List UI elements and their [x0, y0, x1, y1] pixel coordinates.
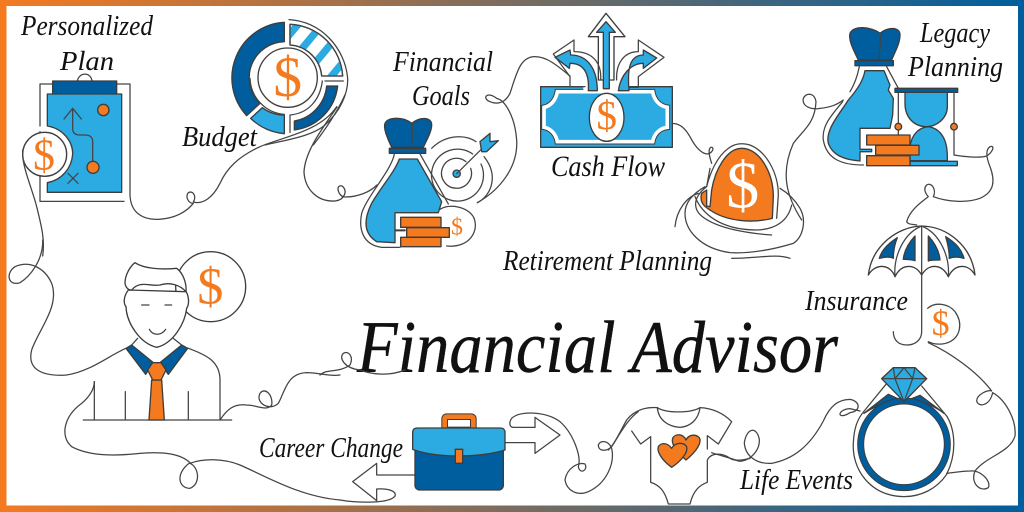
bag body	[366, 159, 442, 243]
ring band fill	[861, 401, 947, 488]
connector to umbrella	[907, 146, 993, 225]
panel: budget donut chart	[232, 14, 353, 145]
title: Financial Advisor	[356, 307, 839, 389]
connector to cash flow	[477, 57, 570, 203]
connector to man	[23, 150, 43, 256]
knot crease	[879, 35, 881, 60]
ring shoulders	[864, 394, 944, 413]
gem	[882, 368, 927, 402]
small coin outline	[928, 304, 960, 344]
heading: budget: Budget	[182, 121, 258, 153]
clasp	[455, 449, 463, 463]
canopy panels	[879, 236, 964, 261]
segment stripes	[290, 24, 343, 76]
dollar sign: $	[33, 130, 55, 179]
case flap	[413, 428, 505, 456]
connector nest to bag	[786, 94, 843, 220]
money bubble	[176, 252, 246, 322]
panel: legacy planning bag and hourglass	[786, 28, 993, 225]
panel: advisor figure	[9, 240, 340, 500]
panel: cash flow bill and arrows	[541, 13, 672, 147]
target rings	[431, 137, 492, 203]
centre circle	[258, 48, 317, 107]
heading: planning: Planning	[907, 51, 1003, 83]
clipboard clip ring	[77, 74, 92, 82]
panel: career change briefcase	[320, 352, 638, 502]
bag knot	[385, 118, 432, 147]
segment dark	[232, 22, 284, 116]
left arrow	[340, 463, 415, 502]
heading: plan: Plan	[59, 46, 114, 76]
hourglass bottom bowl	[910, 127, 947, 161]
target arrow fletching	[480, 133, 498, 152]
panel: retirement nest egg	[672, 123, 803, 258]
heading: career change: Career Change	[259, 432, 403, 464]
plan dots	[87, 104, 109, 173]
bag band	[855, 61, 893, 66]
clipboard outline	[40, 84, 337, 219]
handle fill	[445, 417, 473, 430]
segment dark small	[294, 86, 338, 130]
face details	[132, 305, 182, 345]
heading: goals: Goals	[412, 80, 470, 112]
dollar sign: $	[726, 149, 759, 222]
hair	[125, 263, 186, 292]
dollar sign: $	[197, 258, 223, 316]
title connector	[320, 352, 405, 375]
heading: cash flow: Cash Flow	[551, 150, 665, 183]
dollar sign: $	[596, 92, 617, 138]
dollar coin	[23, 132, 67, 176]
head	[124, 290, 189, 347]
panel: life events ring	[712, 343, 1015, 497]
gem facets	[882, 368, 927, 402]
panel: insurance umbrella	[868, 226, 975, 345]
plan route arrow	[64, 108, 93, 183]
dollar sign: $	[451, 214, 463, 240]
centre arrow	[588, 13, 625, 80]
clipboard sheet	[47, 94, 122, 192]
canopy ribs	[895, 226, 949, 277]
connector from clipboard	[9, 240, 126, 375]
ring band	[861, 401, 947, 488]
bag outline	[361, 154, 448, 247]
ring outer outline	[853, 384, 954, 497]
hourglass pendulum dots	[895, 123, 957, 130]
connector from bag to onesie	[510, 412, 638, 493]
bag knot	[850, 28, 900, 60]
heading: retirement planning: Retirement Planning	[502, 245, 712, 277]
case body	[415, 445, 503, 490]
clipboard header	[53, 81, 117, 96]
collar	[126, 345, 188, 374]
dollar sign: $	[932, 303, 950, 343]
outer swirl line	[265, 20, 348, 145]
right arrow	[617, 40, 664, 91]
connector life events	[712, 399, 860, 463]
connector to title	[220, 373, 340, 420]
bag body	[828, 71, 893, 161]
hourglass top bar	[895, 88, 958, 92]
connector: budget to goals	[304, 107, 377, 201]
small coin	[440, 206, 475, 246]
body lines	[83, 348, 232, 420]
centre arrow fill	[597, 22, 615, 89]
umbrella handle	[893, 275, 922, 345]
target bullseye	[453, 170, 460, 177]
segment light	[251, 108, 284, 134]
heading: personalized plan: Personalized	[20, 10, 153, 42]
panel: personalized plan clipboard	[23, 74, 337, 256]
knot crease	[412, 123, 413, 147]
bag outline	[823, 67, 898, 165]
heading: life events: Life Events	[739, 464, 853, 496]
arrow base gap	[583, 83, 620, 92]
left arrow	[553, 40, 601, 91]
target arrow shaft	[457, 147, 483, 174]
panel: onesie with hearts	[608, 408, 750, 504]
nest strands	[685, 187, 803, 258]
hourglass top bowl	[905, 92, 947, 127]
oval with dollar	[589, 93, 624, 141]
connector from cash flow	[672, 123, 713, 163]
coin stack	[867, 135, 919, 166]
inner ring	[250, 78, 284, 114]
back heart	[672, 435, 700, 460]
tie knot	[148, 363, 166, 380]
front heart	[658, 443, 687, 467]
tie	[149, 380, 164, 420]
heading: legacy: Legacy	[919, 17, 990, 49]
handle	[445, 417, 473, 430]
connector umbrella to ring	[928, 343, 1015, 489]
heading: insurance: Insurance	[804, 285, 908, 317]
bill inner border	[544, 92, 667, 142]
hourglass rods	[898, 92, 954, 155]
hourglass base	[910, 161, 957, 166]
egg highlight outline	[707, 144, 778, 218]
egg	[701, 148, 773, 221]
panel: financial goals bag and target	[361, 57, 570, 247]
segment outline	[290, 81, 343, 132]
bag band	[389, 148, 426, 153]
bottom connector	[65, 382, 340, 500]
heading: financial: Financial	[392, 46, 493, 78]
coin stack	[401, 217, 449, 247]
right arrow	[505, 417, 560, 453]
nest strand left	[675, 193, 698, 227]
onesie collar	[657, 408, 700, 427]
onesie outline	[608, 408, 750, 504]
bill background	[541, 87, 672, 147]
canopy	[868, 226, 975, 277]
dollar sign: $	[273, 46, 302, 109]
